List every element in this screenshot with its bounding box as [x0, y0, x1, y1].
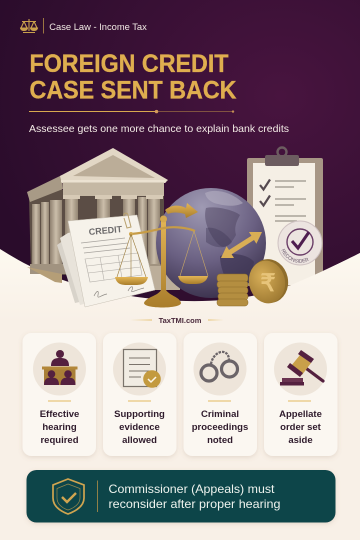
card label: [40, 409, 79, 446]
title: FOREIGN CREDIT: [30, 50, 228, 78]
side wing: [29, 184, 62, 274]
card label: Supporting: [114, 409, 165, 420]
subtitle: Assessee gets one more chance to explain bank credits: [29, 124, 289, 135]
illustration: globe: [156, 188, 266, 298]
panel: supporting evidence: [103, 333, 176, 456]
card label: [192, 409, 248, 446]
icon: handcuffs: [194, 342, 246, 396]
card label: evidence: [119, 422, 160, 433]
icon: balance scale small: [20, 19, 38, 32]
title rule: [29, 110, 234, 113]
card label: noted: [207, 435, 233, 446]
title: CASE SENT BACK: [30, 76, 236, 104]
card label: order set: [280, 422, 322, 433]
callout text: Commissioner (Appeals) must: [108, 482, 275, 496]
card label: Criminal: [201, 409, 239, 420]
stamp: [278, 221, 322, 265]
stamp text: RECONSIDER: [282, 248, 309, 263]
card label: [279, 409, 322, 446]
icon: shield check: [53, 479, 84, 514]
website label: TaxTMI.com: [159, 316, 202, 325]
callout text: [108, 482, 280, 511]
illustration: clipboard: [247, 146, 323, 286]
callout text: reconsider after proper hearing: [108, 497, 280, 511]
card label: required: [40, 435, 79, 446]
continents: [205, 191, 243, 206]
callout banner: [26, 470, 336, 522]
header brand row: [20, 18, 147, 34]
icon: gavel: [274, 342, 327, 396]
title: [30, 50, 236, 104]
main body: [62, 190, 164, 275]
illustration: credit documents: [57, 213, 155, 307]
icon: hearing: [33, 342, 86, 396]
card label: Appellate: [279, 409, 322, 420]
checks: [260, 180, 270, 206]
rupee glyph: ₹: [260, 270, 276, 297]
panel: effective hearing: [22, 333, 96, 456]
cream wave: [0, 249, 360, 540]
card label: [114, 409, 165, 446]
document heading: CREDIT: [88, 224, 123, 237]
illustration: gold scale: [115, 216, 208, 308]
website label: [130, 316, 224, 325]
illustration: courthouse: [27, 148, 180, 290]
illustration: rupee coin and stack: [217, 256, 292, 307]
panel: criminal proceedings: [184, 333, 257, 456]
card label: Effective: [40, 409, 79, 420]
card label: aside: [288, 435, 313, 446]
background panel: dark plum header: [0, 0, 360, 320]
icon: document with check: [113, 342, 166, 396]
clip: [265, 155, 299, 166]
brand label: Case Law - Income Tax: [49, 21, 147, 32]
card label: allowed: [122, 435, 157, 446]
card label: proceedings: [192, 422, 248, 433]
cream wave overlap on clipboard: [284, 253, 360, 322]
gold arrows: [165, 203, 198, 218]
panel: appellate order: [264, 333, 338, 456]
card label: hearing: [42, 422, 77, 433]
